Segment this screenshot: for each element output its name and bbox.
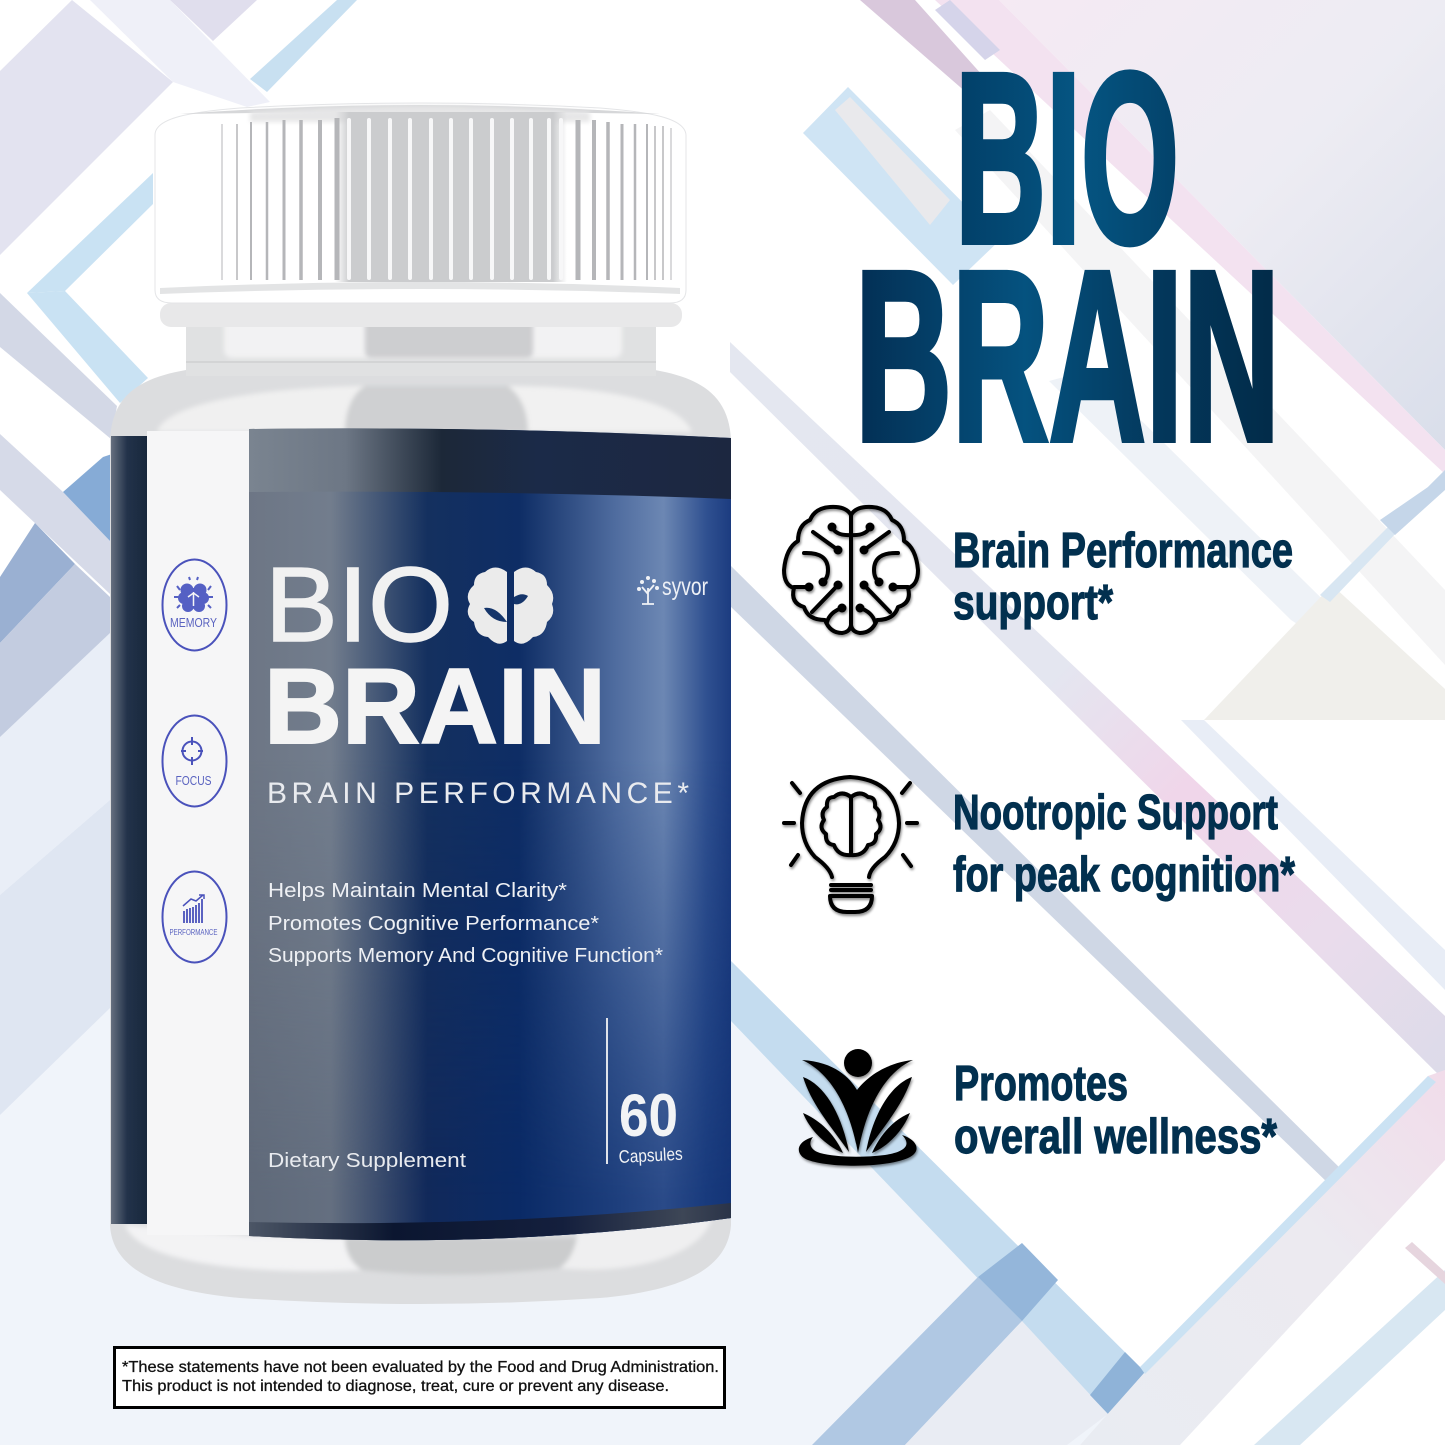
text: nootropic support: Nootropic Support [953, 786, 1278, 840]
title [855, 23, 1280, 492]
label subtitle: BRAIN PERFORMANCE* [267, 777, 689, 810]
product bottle [110, 103, 731, 1304]
badge: performance [162, 872, 226, 962]
label benefits: Supports Memory And Cognitive Function* [268, 945, 663, 967]
syvor logo [637, 573, 708, 604]
pale lower-left field [0, 633, 1108, 1445]
label logo: BIO: BIO [265, 546, 453, 664]
icon: brain [174, 577, 213, 612]
text: nootropic support [953, 786, 1296, 902]
left hemisphere [784, 507, 851, 633]
disclaimer box [114, 1348, 724, 1408]
lower label shading [249, 812, 731, 1240]
capsule count: 60 [619, 1082, 678, 1149]
title: BIO [955, 23, 1179, 294]
label logo: BRAIN: BRAIN [264, 646, 606, 766]
badge: memory [162, 560, 226, 650]
text: brain performance [953, 524, 1293, 630]
label benefits: Promotes Cognitive Performance* [268, 913, 599, 935]
badge: focus: FOCUS [176, 774, 212, 788]
disclaimer box: This product is not intended to diagnose, treat, cure or prevent any disease. [122, 1378, 669, 1395]
syvor logo: syvor [662, 573, 708, 601]
shoulder highlights [157, 386, 692, 432]
icon: wellness figure [799, 1049, 917, 1166]
badge: performance: PERFORMANCE [170, 927, 218, 937]
text: nootropic support: for peak cognition* [953, 848, 1296, 902]
text: brain performance: support* [953, 576, 1114, 630]
text: wellness: Promotes [954, 1057, 1128, 1111]
text: brain performance: Brain Performance [953, 524, 1293, 578]
text: wellness [954, 1057, 1278, 1164]
icon: brain circuit [784, 507, 918, 633]
badge: focus [162, 716, 226, 806]
label logo: brain icon [468, 568, 553, 644]
label benefits: Helps Maintain Mental Clarity* [268, 880, 567, 902]
label benefits [268, 880, 663, 967]
base highlights [125, 1218, 712, 1275]
top right shards [999, 0, 1445, 450]
neck ring [160, 303, 682, 327]
icon: target [181, 737, 203, 765]
disclaimer box: *These statements have not been evaluated by the Food and Drug Administration. [122, 1359, 719, 1376]
neck [186, 313, 656, 376]
label top band [249, 428, 731, 499]
badge: memory: MEMORY [170, 616, 218, 630]
dietary supplement: Dietary Supplement [268, 1150, 466, 1172]
bottle body [110, 370, 731, 1304]
long diagonal strips [730, 342, 1445, 1081]
blue label panel [249, 428, 731, 1240]
white label panel [147, 431, 249, 1235]
icon: light bulb with brain [784, 777, 917, 912]
cap ribs, centre highlights [349, 120, 561, 278]
bottom right shards [730, 960, 1145, 1414]
right hemisphere [851, 507, 918, 633]
divider line [606, 1018, 608, 1164]
icon: rising bars [183, 895, 204, 923]
cap grooves, left and right [222, 118, 671, 280]
text: wellness: overall wellness* [954, 1110, 1278, 1164]
label bottom band [249, 1203, 731, 1240]
left dark strip [111, 436, 147, 1224]
capsule count: Capsules [618, 1144, 683, 1167]
cap [155, 103, 686, 303]
